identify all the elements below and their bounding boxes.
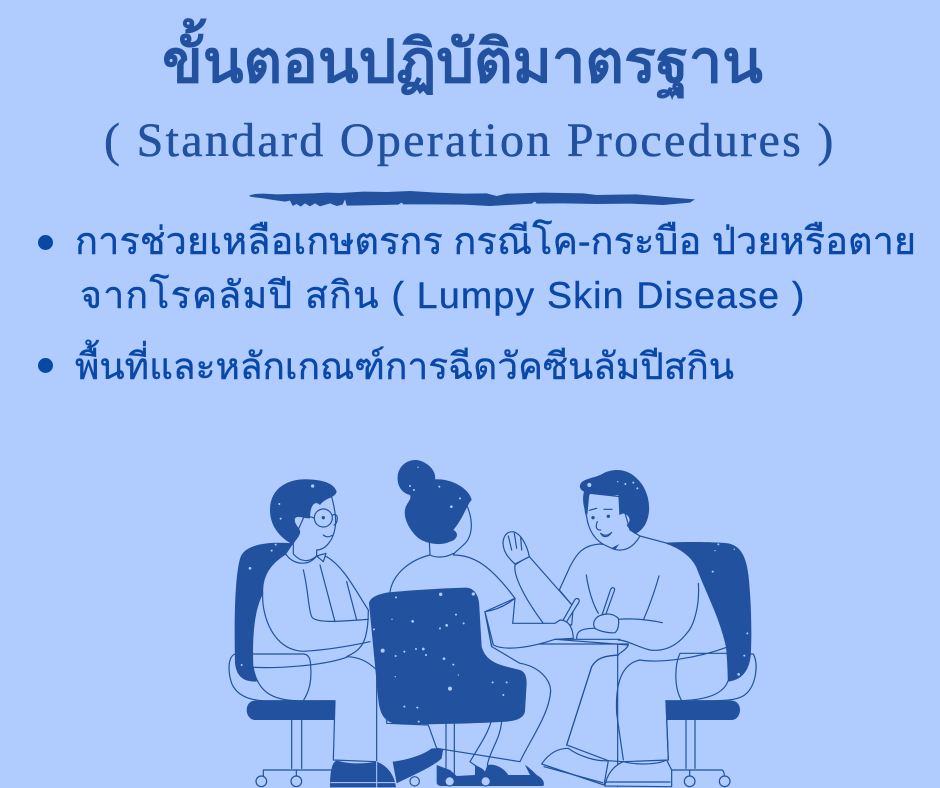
front chair back with speckles (369, 588, 527, 724)
person in the middle seen from behind (387, 460, 551, 786)
title: ขั้นตอนปฏิบัติมาตรฐาน (162, 29, 763, 95)
bullet item 1 (38, 219, 916, 316)
bullet item 2: พื้นที่และหลักเกณฑ์การฉีดวัคซีนลัมปีสกิน (75, 346, 734, 387)
bullet item 1: การช่วยเหลือเกษตรกร กรณีโค-กระบือ ป่วยหรือตาย (75, 221, 916, 263)
subtitle: ( Standard Operation Procedures ) (104, 114, 836, 167)
bullet item 1: จากโรคลัมปี สกิน ( Lumpy Skin Disease ) (80, 274, 806, 316)
bullet list (38, 219, 916, 387)
person on the left in chair (229, 479, 443, 787)
brush stroke divider (249, 191, 695, 207)
person on the right talking (485, 470, 756, 787)
